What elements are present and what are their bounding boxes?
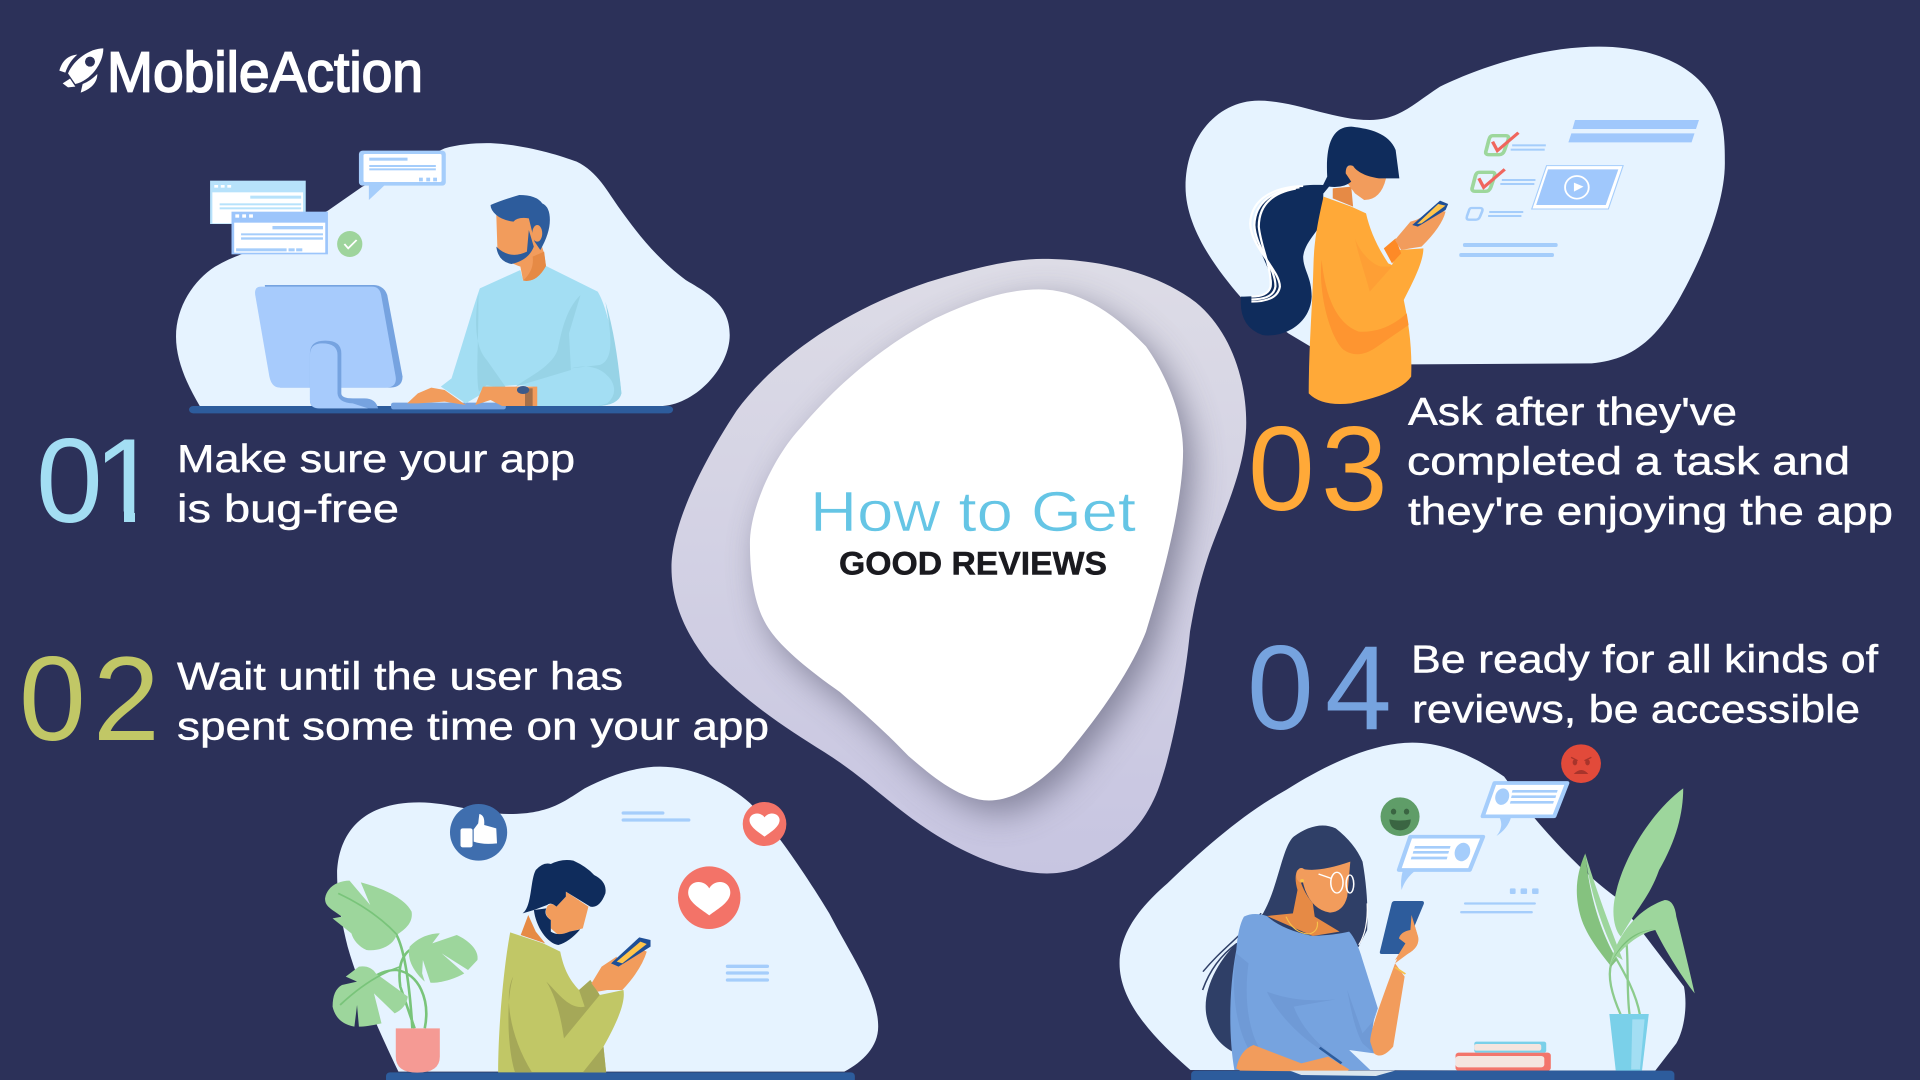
- video player: [1532, 166, 1623, 209]
- browser window front: [232, 212, 328, 254]
- logo: MobileAction: [59, 40, 423, 104]
- icon: large heart: [678, 866, 740, 929]
- desk: [189, 406, 673, 413]
- icon: rocket: [59, 48, 103, 93]
- icon: angry face: [1561, 744, 1601, 783]
- step 01 number: 1: [94, 414, 160, 548]
- step 01 text: is bug-free: [177, 488, 399, 531]
- woman with glasses and tablet: [1203, 826, 1424, 1076]
- blob background: [337, 767, 878, 1072]
- logo wordmark: MobileAction: [107, 40, 423, 104]
- speech bubble: [359, 151, 446, 200]
- checklist: [1467, 133, 1546, 220]
- small text lines: [1460, 888, 1539, 913]
- step 01 number: 0: [36, 414, 103, 548]
- step 03 text: Ask after they've: [1408, 391, 1737, 434]
- browser window back: [210, 181, 306, 224]
- desk: [1191, 1071, 1674, 1080]
- icon: green check: [337, 231, 362, 257]
- step 01 text: Make sure your app: [177, 438, 575, 481]
- step 03 text: they're enjoying the app: [1408, 490, 1893, 534]
- title: How to Get: How to Get: [810, 480, 1136, 544]
- header bars: [1568, 120, 1699, 142]
- subtitle: GOOD REVIEWS: GOOD REVIEWS: [839, 546, 1107, 582]
- step 02 text: spent some time on your app: [177, 706, 769, 748]
- panel: illustration 01 man at computer: [176, 143, 730, 413]
- potted plant: [1577, 788, 1695, 1072]
- step 03 number: 0: [1248, 402, 1315, 536]
- step 02 text: Wait until the user has: [177, 656, 623, 698]
- panel: central blob with title: [671, 259, 1246, 873]
- step 03 text: completed a task and: [1407, 440, 1850, 484]
- chat bubble upper: [1483, 783, 1567, 836]
- man looking at phone: [498, 860, 651, 1072]
- step 02 number: 0: [19, 632, 86, 766]
- icon: happy face: [1381, 797, 1420, 836]
- keyboard: [391, 403, 506, 409]
- step 04 text: reviews, be accessible: [1412, 688, 1860, 732]
- bottom text lines: [1459, 243, 1558, 257]
- blob layers: [671, 259, 1246, 873]
- step 04 number: 4: [1325, 621, 1392, 755]
- panel: illustration 03 woman with checklist: [1186, 47, 1725, 404]
- icon: thumbs up: [450, 804, 507, 861]
- blob background: [1186, 47, 1725, 364]
- blob background: [176, 143, 730, 406]
- panel: illustration 02 man with phone: [325, 767, 878, 1080]
- step 04 text: Be ready for all kinds of: [1411, 638, 1878, 682]
- potted plant: [325, 881, 478, 1073]
- chat bubble lower: [1399, 837, 1483, 890]
- panel: illustration 04 woman with tablet: [1120, 743, 1695, 1080]
- desk: [386, 1072, 855, 1080]
- woman with ponytail: [1241, 127, 1448, 404]
- man at computer: [407, 195, 621, 406]
- cover for numeral foot: [100, 512, 159, 524]
- step 02 number: 2: [93, 632, 160, 766]
- blob background: [1120, 743, 1685, 1071]
- step 04 number: 0: [1247, 621, 1314, 755]
- icon: small heart: [743, 802, 786, 846]
- step 03 number: 3: [1321, 402, 1388, 536]
- stack of books: [1456, 1042, 1551, 1071]
- decorative text lines: [622, 811, 769, 982]
- computer monitor: [255, 285, 403, 408]
